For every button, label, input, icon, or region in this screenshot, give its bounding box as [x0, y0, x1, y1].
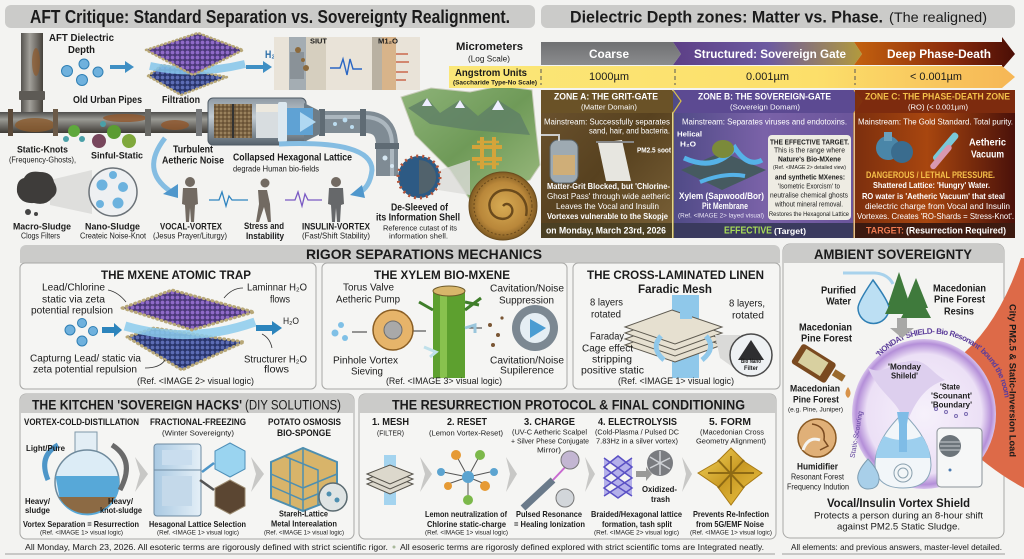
linen labels: stripping — [592, 354, 632, 366]
step 5: form: (Macedonian Cross — [700, 430, 765, 436]
step 2: reset: 2. RESET — [447, 416, 487, 428]
zone C footer: (Resurrection Required) — [906, 226, 1006, 236]
hack: fractional freezing: Hesagonal Lattice Selection — [149, 519, 246, 529]
step 5: form: from 5G/EMF Noise — [696, 519, 764, 529]
axis labels: Micrometers — [456, 41, 523, 53]
zone A mainstream note — [544, 118, 670, 136]
heading: ambient sovereignty — [783, 244, 1004, 263]
heading: dielectric depth zones: Dielectric Depth zones: Matter vs. Phase. — [570, 8, 883, 26]
icon: macro and nano sludge — [17, 168, 137, 216]
caption: vortex shield — [814, 496, 983, 532]
zone B footer: EFFECTIVE — [724, 226, 772, 236]
callout: effective target: THE EFFECTIVE TARGET. — [770, 138, 849, 146]
label: collapsed lattice — [233, 152, 352, 174]
label: purified water: Water — [826, 296, 851, 308]
sub-panel: MXene atomic trap: THE MXENE ATOMIC TRAP — [101, 268, 251, 282]
footer notes: All esoseric terms are rigorosly defined explored with strict scientific toms are Integrated neatly. — [400, 542, 764, 552]
inset: membrane cross-section: M1₂O — [378, 38, 399, 46]
xylem labels: Suppression — [499, 296, 554, 306]
panel: rigor separations mechanics — [20, 245, 780, 389]
callout: effective target: and synthetic MXenes: — [775, 174, 845, 182]
icon: inhaling face — [798, 419, 836, 457]
zone B footer — [724, 226, 806, 236]
zone B footer: (Target) — [774, 226, 806, 236]
scale band: micrometre arrows: Structured: Sovereign Gate — [694, 47, 846, 61]
zone C heading: ZONE C: THE PHASE-DEATH ZONE — [865, 92, 1010, 102]
zone B heading — [698, 92, 831, 112]
label: turbulent noise — [162, 144, 224, 166]
step 2: reset: (Ref. <IMAGE 1> visual logic) — [425, 530, 508, 536]
zone A: grit gate — [541, 90, 680, 238]
hack: vortex cold distillation: Heavy/ — [25, 496, 51, 506]
label: pine resins: Macedonian — [933, 284, 986, 294]
labels: vortex captions: Stress and — [244, 221, 284, 231]
callout: effective target: Restores the Hexagonal Lattice — [769, 212, 850, 218]
sub-panel: xylem bio-MXene — [322, 263, 567, 389]
hack: potato osmosis sponge: Metal Interealation — [271, 520, 337, 528]
step 4: electrolysis: formation, tash split — [602, 519, 672, 529]
icon: flask — [45, 432, 126, 515]
hack: potato osmosis sponge: BIO-SPONGE — [277, 428, 331, 438]
scale band: angstrom — [449, 66, 1015, 88]
scale band: angstrom: < 0.001µm — [910, 71, 962, 83]
zone B heading: ZONE B: THE SOVEREIGN-GATE — [698, 92, 831, 102]
label: sludge captions: Nano-Sludge — [85, 222, 140, 232]
zone A mainstream note: sand, hair, and bacteria. — [589, 126, 670, 136]
shield aura: Shileld' — [891, 372, 918, 380]
step 3: charge: = Healing Ionization — [514, 519, 585, 529]
icon: virus shell — [398, 156, 470, 198]
inversion load wedge — [960, 258, 1024, 488]
xylem labels: Aetheric Pump — [336, 294, 400, 306]
hack: fractional freezing: (Ref. <IMAGE 1> visual logic) — [157, 530, 239, 536]
heading: kitchen hacks: (DIY SOLUTIONS) — [245, 398, 341, 412]
xylem labels: Torus Valve — [343, 282, 394, 294]
inset: membrane cross-section: SIUT — [310, 38, 328, 46]
hack: vortex cold distillation: Vortex Separation = Resurrection — [23, 519, 139, 529]
label: pine forest oil: Macedonian — [790, 384, 840, 394]
axis labels — [456, 41, 523, 64]
zone A body: Vortexes vulnerable to the Skopje — [547, 211, 668, 221]
labels: vortex captions: Instability — [246, 231, 284, 241]
xylem labels: Cavitation/Noise — [490, 284, 564, 294]
arrow: down to shield — [890, 318, 914, 338]
pipe labels: Filtration — [162, 94, 200, 106]
step 3: charge: Mirror) — [537, 448, 561, 454]
MXene trap labels: static via zeta — [42, 294, 105, 306]
zone C heading — [865, 92, 1010, 112]
axis labels: (Log Scale) — [468, 54, 510, 64]
icon: freezer and hexagons — [154, 443, 245, 516]
icon: purified water drop — [843, 273, 893, 324]
zone A body: Leaves the Vocal and Insulin — [556, 201, 659, 211]
hack: fractional freezing: (Winter Sovereignty) — [162, 428, 235, 438]
MXene trap lattice — [122, 290, 255, 370]
label: xylem: (Ref. <IMAGE 2> layed visual) — [678, 212, 764, 220]
step 5: form: (Ref. <IMAGE 1> visual logic) — [690, 530, 772, 536]
label: de-sleeved — [376, 202, 460, 240]
heading: ambient sovereignty: AMBIENT SOVEREIGNTY — [814, 246, 973, 262]
zone A heading: (Matter Domain) — [581, 102, 638, 112]
filtration housing — [208, 98, 320, 145]
label: pine resins: Pine Forest — [934, 294, 986, 306]
step 3: charge: Pulsed Resonance — [516, 509, 582, 519]
sub-panel: cross-laminated linen: THE CROSS-LAMINATED LINEN — [587, 268, 764, 282]
label: xylem — [678, 191, 764, 220]
heading: dielectric depth zones — [541, 5, 1015, 28]
MXene trap labels: H₂O — [283, 316, 299, 326]
arrow: electrolysis to form — [682, 457, 692, 492]
scale band: micrometre arrows: Coarse — [589, 47, 629, 61]
callout: effective target: 'Isometric Exorcism' to — [778, 184, 840, 190]
hack: vortex cold distillation: knot-sludge — [100, 505, 142, 515]
zone C footer: TARGET: — [866, 226, 904, 236]
linen labels: rotated — [732, 310, 764, 322]
step 4: electrolysis: (Ref. <IMAGE 2> visual logic) — [594, 530, 679, 536]
hack: vortex cold distillation: sludge — [25, 505, 50, 515]
scale band: angstrom: Angstrom Units — [455, 67, 527, 79]
shield aura: 'Monday — [888, 362, 922, 372]
callout: effective target: (Ref. <IMAGE 2> detailed view) — [773, 165, 846, 171]
step 3: charge: + Silver Phese Conjugate — [511, 438, 589, 446]
step 5: form: 5. FORM — [709, 416, 751, 428]
icon: pine trees — [885, 272, 931, 318]
linen labels: (Ref. <IMAGE 1> visual logic) — [618, 376, 734, 386]
icon: RO pump and tubes — [876, 131, 960, 170]
step 2: reset: (Lemon Vortex-Reset) — [429, 428, 503, 438]
callout: effective target: neutralise chemical ghosts — [770, 192, 848, 200]
arrow: charge to electrolysis — [585, 457, 595, 492]
label: purified water: Purified — [821, 286, 856, 296]
sub-panel: cross-laminated linen: Faradic Mesh — [638, 282, 712, 296]
footer notes — [5, 542, 1005, 554]
pipe system — [0, 33, 399, 176]
xylem labels: Sieving — [351, 366, 383, 378]
sub-panel: cross-laminated linen — [573, 263, 780, 389]
xylem labels: Pinhole Vortex — [333, 356, 398, 366]
label: aetheric vacuum: Aetheric — [969, 138, 1006, 148]
labels: vortex captions: INSULIN-VORTEX — [302, 222, 371, 232]
inversion load wedge: City PM2.5 & Static-Inversion Load — [1006, 304, 1018, 457]
zone C body — [857, 170, 1014, 221]
icon: potato lattice cube — [271, 448, 347, 511]
AFT dielectric depth label: AFT Dielectric — [49, 32, 114, 44]
scale band: angstrom: 1000µm — [589, 71, 629, 83]
labels: vortex captions — [153, 221, 371, 241]
shield aura — [850, 328, 1009, 489]
shield aura: 'State — [940, 382, 961, 392]
sub-panel: xylem bio-MXene: THE XYLEM BIO-MXENE — [374, 268, 510, 282]
heading: kitchen hacks — [20, 394, 354, 413]
label: helical water: Helical — [677, 130, 702, 138]
zone C footer — [866, 226, 1006, 236]
AFT dielectric depth label — [49, 32, 114, 56]
step 1: mesh: 1. MESH — [372, 416, 409, 428]
zone A heading — [554, 92, 658, 112]
heading: rigor separations: RIGOR SEPARATIONS MECHANICS — [306, 246, 542, 262]
label: pine forest oil: Pine Forest — [793, 394, 840, 406]
MXene trap labels: flows — [270, 294, 290, 306]
MXene membrane illustration — [146, 33, 245, 95]
icon: spiral disc — [469, 172, 537, 240]
icon: oil bottle — [791, 343, 850, 398]
linen labels — [581, 298, 765, 386]
xylem illustration — [332, 286, 558, 378]
step 4: electrolysis — [591, 416, 682, 536]
step 1: mesh: (FILTER) — [377, 428, 404, 438]
label: pine forest top: Macedonian — [799, 322, 852, 334]
linen labels: Cage effect — [582, 344, 633, 354]
inflow molecules and arrows — [65, 318, 282, 346]
step 2: reset: Lemon neutralization of — [425, 509, 507, 519]
xylem labels: Cavitation/Noise — [490, 356, 564, 366]
linen stack illustration: Filter — [744, 366, 759, 372]
step 4: electrolysis: Braided/Hexagonal lattice — [591, 509, 682, 519]
map of Macedonia — [401, 86, 540, 200]
linen labels: positive static — [581, 366, 644, 376]
heading: dielectric depth zones: (The realigned) — [889, 9, 987, 25]
arrow: water inflow — [110, 61, 134, 73]
hack: potato osmosis sponge: POTATO OSMOSIS — [268, 417, 341, 427]
step 3: charge: (UV-C Aetheric Scalpel — [512, 430, 587, 436]
MXene trap labels — [30, 282, 307, 386]
label: pine forest oil — [788, 384, 843, 414]
icon: water molecules — [62, 59, 103, 86]
icon: gold Macedonian cross — [698, 448, 762, 505]
label: de-sleeved: Reference cutast of its — [383, 224, 457, 232]
step 4: electrolysis: 7.83Hz in a silver vortex) — [596, 438, 678, 446]
sub-panel: MXene atomic trap — [20, 263, 316, 389]
zone A mainstream note: Mainstream: Successfully separates — [544, 118, 670, 126]
zone A footer: on Monday, March 23rd, 2026 — [546, 226, 666, 236]
label: de-sleeved: information shell. — [389, 232, 448, 240]
hack: potato osmosis sponge: Stareh-Lattice — [279, 510, 328, 518]
callout: effective target: Nature's Bio-MXene — [778, 156, 841, 164]
icon: UV scalpel and mirrors — [523, 451, 579, 508]
zone A body: Matter-Grit Blocked, but 'Chlorine- — [547, 181, 670, 191]
step 5: form: Prevents Re-Infection — [693, 509, 769, 519]
MXene trap labels: Laminnar H₂O — [247, 282, 307, 294]
arrow: to potato sponge — [251, 457, 264, 492]
zone C body: Shattered Lattice: 'Hungry' Water. — [873, 180, 990, 190]
arrows: flow into body — [154, 138, 372, 198]
step 4: electrolysis: 4. ELECTROLYSIS — [598, 416, 677, 428]
label: aetheric vacuum: Vacuum — [971, 150, 1004, 160]
AFT dielectric depth label: Depth — [68, 44, 95, 56]
xylem labels: (Ref. <IMAGE 3> visual logic) — [386, 376, 502, 386]
arrow: mesh to reset — [420, 457, 432, 492]
zone A body — [547, 181, 671, 221]
heading: kitchen hacks: THE KITCHEN 'SOVEREIGN HACKS' — [32, 398, 242, 412]
shield aura: Static-Scouring — [850, 411, 865, 459]
label: humidifier: Humidifier — [797, 462, 838, 472]
caption: vortex shield: Vocal/Insulin Vortex Shield — [827, 496, 970, 510]
callout: effective target — [768, 135, 851, 220]
hack: vortex cold distillation: (Ref. <IMAGE 1> visual logic) — [40, 530, 123, 536]
heading: rigor separations — [20, 245, 780, 263]
scale band: angstrom: (Saccharide Type-No Scale) — [453, 80, 537, 86]
label: sludge captions — [13, 222, 147, 240]
icons: stressed people and waves — [182, 177, 344, 222]
label: humidifier — [787, 462, 849, 492]
heading: resurrection protocol: THE RESURRECTION PROTOCOL & FINAL CONDITIONING — [392, 398, 745, 412]
hack: vortex cold distillation — [23, 417, 142, 536]
callout: effective target: This is the range where — [774, 148, 845, 154]
panel: dielectric depth zones — [449, 5, 1015, 238]
step 4: electrolysis: (Cold-Plasma / Pulsed DC — [595, 430, 679, 436]
scale band: micrometre arrows — [541, 37, 1015, 69]
label: purified water — [821, 286, 856, 308]
label: sludge captions: Createic Noise-Knot — [80, 232, 147, 240]
label: sludge captions: Macro-Sludge — [13, 222, 71, 232]
MXene trap labels: (Ref. <IMAGE 2> visual logic) — [137, 376, 254, 386]
labels: vortex captions: (Jesus Prayer/Liturgy) — [153, 232, 227, 240]
hack: potato osmosis sponge — [264, 417, 347, 536]
zone C body: Vortexes. Creates 'RO-Shards = Stress-Knot'. — [857, 211, 1014, 221]
linen labels: Faraday — [590, 332, 624, 342]
step 2: reset: Chlorine static-charge — [427, 519, 506, 529]
zone C body: RO water is 'Aetheric Vacuum' that steal — [862, 191, 1005, 201]
icon: canister and towel — [541, 135, 634, 183]
label: collapsed lattice: Collapsed Hexagonal Lattice — [233, 152, 352, 164]
label: static knots: Static-Knots — [17, 144, 68, 156]
linen stack illustration: Bio Nano — [741, 359, 761, 365]
label: pine forest top: Pine Forest — [801, 334, 853, 344]
hack: vortex cold distillation: VORTEX-COLD-DISTILLATION — [24, 417, 139, 427]
scale band: micrometre arrows: Deep Phase-Death — [887, 47, 991, 61]
label: xylem: Xylem (Sapwood/Bor) — [679, 191, 764, 201]
linen labels: 8 layers — [590, 298, 623, 308]
label: turbulent noise: Aetheric Noise — [162, 156, 224, 166]
panel: ambient sovereignty — [782, 244, 1024, 538]
zone A body: Ghost Pass' through wide aetheric — [547, 191, 671, 201]
hack: vortex cold distillation: Heavy/ — [108, 496, 134, 506]
zone C: phase-death — [855, 90, 1015, 238]
footer notes: All elements: and previous answers, master-level detailed. — [791, 542, 1002, 552]
label: humidifier: Frequency Indution — [787, 482, 849, 492]
step 2: reset — [425, 416, 508, 536]
panel: kitchen sovereign hacks — [20, 394, 354, 539]
zone C body: DANGEROUS / LETHAL PRESSURE. — [866, 170, 995, 180]
MXene trap labels: flows — [264, 364, 289, 376]
icon: gold cross emblem — [472, 137, 502, 169]
shield aura: 'NONDAY SHIELD- Bio Resonant' bound the room — [876, 328, 1009, 398]
icon: xylem membrane — [681, 140, 766, 190]
zone B mainstream note: Mainstream: Separates viruses and endotoxins. — [682, 118, 847, 126]
step 5: form — [690, 416, 772, 536]
label: aetheric vacuum — [969, 138, 1006, 160]
step 3: charge — [511, 416, 589, 529]
panel: resurrection protocol — [359, 394, 776, 539]
linen labels: rotated — [591, 310, 621, 320]
xylem labels: Supilerence — [500, 366, 554, 376]
label: helical water — [677, 130, 702, 148]
label: sludge captions: Clogs Filters — [21, 232, 60, 240]
label: static knots — [9, 144, 76, 164]
H2O outflow — [246, 49, 282, 73]
step 4: electrolysis: Oxidized- — [642, 484, 677, 494]
icon: heavy metal molecules — [63, 121, 136, 148]
icon: humidifiers and air purifier — [858, 408, 982, 489]
step 1: mesh — [367, 416, 413, 505]
footer notes: All Monday, March 23, 2026. All esoteric terms are rigorously defined with strict scientific rigor. — [25, 542, 388, 552]
label: humidifier: Resonant Forest — [791, 472, 845, 482]
label: pine forest oil: (e.g. Pine, Juniper) — [788, 406, 843, 414]
pipe labels: Old Urban Pipes — [73, 94, 142, 106]
zone C mainstream note: Mainstream: The Gold Standard. Total purity. — [858, 118, 1013, 126]
label: collapsed lattice: degrade Human bio-fields — [233, 164, 319, 174]
xylem labels — [333, 282, 564, 386]
hack: potato osmosis sponge: (Ref. <IMAGE 1> visual logic) — [264, 530, 344, 536]
icon: chlorine molecule — [437, 450, 498, 505]
MXene trap labels: zeta potential repulsion — [33, 364, 137, 376]
labels: vortex captions: (Fast/Shift Stability) — [302, 232, 370, 240]
caption: vortex shield: Protects a person during an 8-hour shift — [814, 510, 983, 522]
label: de-sleeved: its Information Shell — [376, 212, 460, 224]
pipe labels — [73, 94, 200, 106]
label: turbulent noise: Turbulent — [173, 144, 214, 156]
shield aura: 'Boundary' — [931, 400, 972, 410]
label: xylem: Pit Membrane — [702, 201, 748, 211]
linen stack illustration — [625, 295, 772, 378]
inset: membrane cross-section — [274, 37, 420, 90]
caption: vortex shield: against PM2.5 Static Sludge. — [837, 522, 960, 532]
H2O outflow: H₂O — [265, 49, 282, 61]
arrow: to fractional freezing — [135, 457, 148, 492]
zone C body: dielectric charge from Vocal and Insulin — [865, 201, 1010, 211]
label: pine resins: Resins — [944, 306, 974, 318]
MXene trap labels: Capturng Lead/ static via — [30, 354, 141, 364]
MXene trap labels: Lead/Chlorine — [42, 282, 105, 294]
icon: mesh stack — [367, 455, 413, 505]
step 5: form: Geometry Alignment) — [696, 438, 766, 446]
hack: vortex cold distillation: Light/Pure — [26, 443, 65, 453]
zone C heading: (RO) (< 0.001µm) — [908, 102, 969, 112]
arrow: reset to charge — [506, 457, 517, 492]
label: de-sleeved: De-Sleeved of — [391, 202, 449, 214]
callout: effective target: without mineral removal. — [774, 202, 843, 208]
labels: vortex captions: VOCAL-VORTEX — [160, 222, 223, 232]
label: static knots: (Frequency-Ghosts), — [9, 156, 76, 164]
label: helical water: H₂O — [680, 140, 696, 148]
label: pine resins — [933, 284, 986, 318]
zone B heading: (Sovereign Domam) — [730, 102, 801, 112]
hack: fractional freezing: FRACTIONAL-FREEZING — [150, 417, 246, 427]
label: pine forest top — [799, 322, 853, 344]
zone A heading: ZONE A: THE GRIT-GATE — [554, 92, 658, 102]
heading: AFT critique: AFT Critique: Standard Separation vs. Sovereignty Realignment. — [30, 7, 510, 27]
label: sinful static: Sinful-Static — [91, 150, 143, 162]
icon: braided lattice and trash — [604, 450, 673, 498]
panel: AFT critique — [0, 5, 540, 241]
scale band: angstrom: 0.001µm — [746, 71, 789, 83]
label: PM2.5 soot: PM2.5 soot — [637, 146, 671, 154]
leader lines — [108, 288, 272, 368]
step 4: electrolysis: trash — [651, 494, 670, 504]
linen labels: 8 layers, — [729, 298, 765, 310]
hack: fractional freezing — [149, 417, 246, 536]
step 3: charge: 3. CHARGE — [524, 416, 575, 428]
zone B: sovereign gate — [673, 90, 862, 238]
shield aura: 'Scounant' — [931, 392, 972, 400]
MXene trap labels: potential repulsion — [31, 306, 113, 316]
MXene trap labels: Structurer H₂O — [244, 354, 307, 366]
